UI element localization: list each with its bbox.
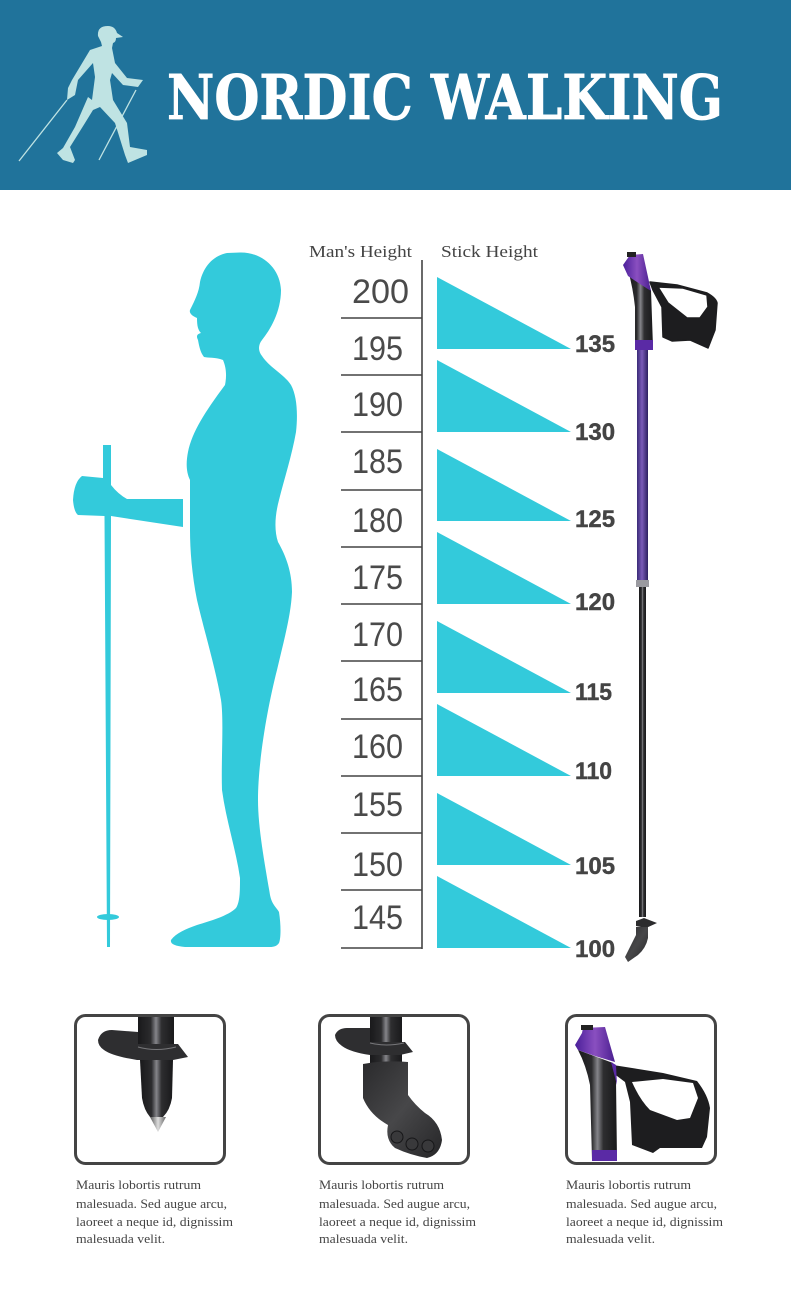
wrist strap	[650, 282, 717, 348]
text block: caption 2	[319, 1177, 476, 1246]
text block: caption 3: laoreet a neque id, dignissim	[566, 1214, 723, 1229]
text block: caption 1: Mauris lobortis rutrum	[76, 1177, 201, 1192]
header banner	[0, 0, 791, 190]
height scale	[341, 260, 422, 949]
man's height numbers: 185	[352, 443, 403, 481]
man's height numbers: 165	[352, 671, 403, 709]
icon: nordic walker	[19, 26, 147, 163]
man's height numbers: 195	[352, 330, 403, 368]
column headings: Man's Height	[309, 242, 412, 261]
stick height numbers: 110	[575, 758, 612, 785]
stick height triangles	[437, 277, 571, 948]
pole tip	[636, 918, 657, 928]
man silhouette	[171, 252, 297, 947]
text block: caption 3: malesuada velit.	[566, 1231, 655, 1246]
panel: pole rubber foot	[320, 1016, 468, 1164]
stick height numbers: 135	[575, 331, 615, 358]
stick height numbers	[575, 331, 615, 963]
text block: caption 1: laoreet a neque id, dignissim	[76, 1214, 233, 1229]
man's height numbers: 190	[352, 386, 403, 424]
column headings: Stick Height	[441, 242, 538, 261]
text block: caption 3: Mauris lobortis rutrum	[566, 1177, 691, 1192]
man's height numbers: 155	[352, 786, 403, 824]
text block: caption 2: malesuada velit.	[319, 1231, 408, 1246]
man's height numbers: 150	[352, 846, 403, 884]
man's height numbers: 200	[352, 273, 409, 311]
column headings	[309, 242, 538, 261]
text block: caption 2: Mauris lobortis rutrum	[319, 1177, 444, 1192]
man's height numbers: 145	[352, 899, 403, 937]
text block: caption 2: laoreet a neque id, dignissim	[319, 1214, 476, 1229]
stick height numbers: 125	[575, 506, 615, 533]
text block: caption 1: malesuada velit.	[76, 1231, 165, 1246]
man's height numbers: 170	[352, 616, 403, 654]
panel: pole grip and strap	[566, 1016, 716, 1164]
stick height numbers: 120	[575, 589, 615, 616]
stick height numbers: 100	[575, 936, 615, 963]
stick height numbers: 105	[575, 853, 615, 880]
man's height numbers	[352, 273, 409, 937]
man's height numbers: 160	[352, 728, 403, 766]
text block: caption 1	[76, 1177, 233, 1246]
text block: caption 2: malesuada. Sed augue arcu,	[319, 1196, 470, 1211]
text block: caption 3: malesuada. Sed augue arcu,	[566, 1196, 717, 1211]
panel: pole tip spike	[76, 1016, 224, 1164]
stick height numbers: 130	[575, 419, 615, 446]
nordic walking pole	[623, 252, 717, 962]
text block: caption 1: malesuada. Sed augue arcu,	[76, 1196, 227, 1211]
ski pole with hand	[73, 445, 183, 947]
text block: caption 3	[566, 1177, 723, 1246]
man's height numbers: 175	[352, 559, 403, 597]
man's height numbers: 180	[352, 502, 403, 540]
stick height numbers: 115	[575, 679, 612, 706]
